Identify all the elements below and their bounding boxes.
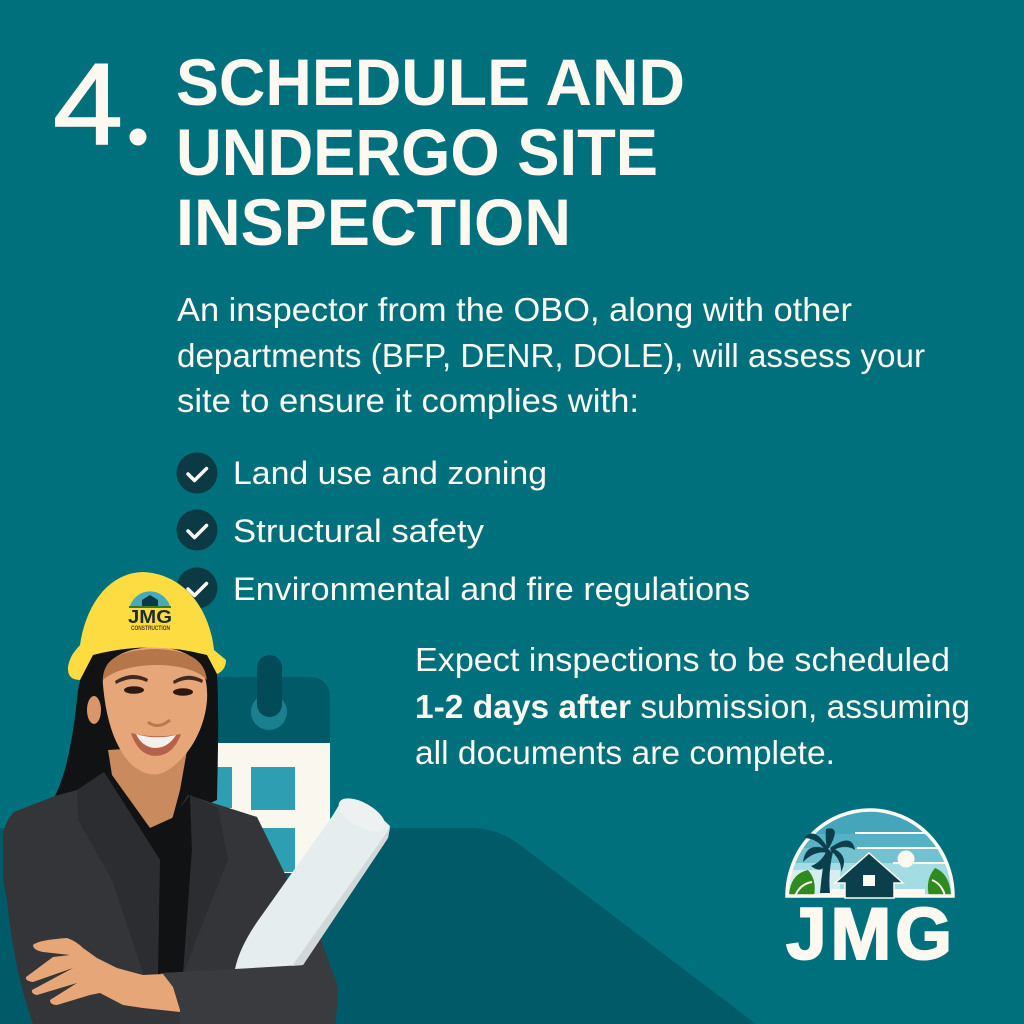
logo emblem: [780, 805, 960, 900]
checklist: [176, 452, 750, 608]
item: structural safety: Structural safety: [233, 513, 484, 549]
ear: [87, 696, 101, 724]
step number: 4: [53, 39, 123, 169]
face: [103, 647, 207, 774]
forehead shadow: [103, 649, 207, 680]
logo wordmark: JMG: [786, 894, 952, 975]
schedule note: Expect inspections to be scheduled: [415, 641, 950, 678]
hat logo: [128, 591, 172, 632]
item: land use: Land use and zoning: [233, 455, 547, 491]
blazer: [3, 772, 337, 1024]
title: UNDERGO SITE: [176, 115, 658, 189]
icon: check 3: [176, 568, 218, 608]
neck: [108, 745, 188, 828]
shirt: [104, 772, 192, 985]
title: SCHEDULE AND: [176, 45, 685, 119]
title: INSPECTION: [176, 185, 571, 259]
icon: check 2: [176, 510, 218, 550]
sleeve: [160, 937, 337, 1024]
step number: [53, 39, 146, 169]
intro text: site to ensure it complies with:: [177, 382, 639, 419]
schedule note: all documents are complete.: [415, 734, 835, 771]
inspector figure: [3, 645, 391, 1024]
schedule note: 1-2 days after submission, assuming: [415, 688, 970, 725]
schedule note: [415, 641, 970, 771]
hair: [55, 645, 218, 830]
intro text: [177, 291, 925, 419]
hand: [26, 938, 180, 1012]
icon: check 1: [176, 452, 218, 494]
item: environmental: Environmental and fire regulations: [233, 571, 750, 607]
hard hat: [68, 572, 226, 680]
hat logo: JMG: [128, 607, 172, 627]
lapels: [77, 772, 160, 985]
face details: [115, 675, 203, 756]
hat logo: CONSTRUCTION: [131, 626, 170, 632]
intro text: departments (BFP, DENR, DOLE), will assess your: [177, 337, 925, 374]
intro text: An inspector from the OBO, along with other: [177, 291, 852, 328]
title: [176, 45, 685, 259]
blueprint roll: [235, 800, 390, 969]
logo: [785, 808, 955, 960]
icon: calendar: [205, 655, 330, 873]
